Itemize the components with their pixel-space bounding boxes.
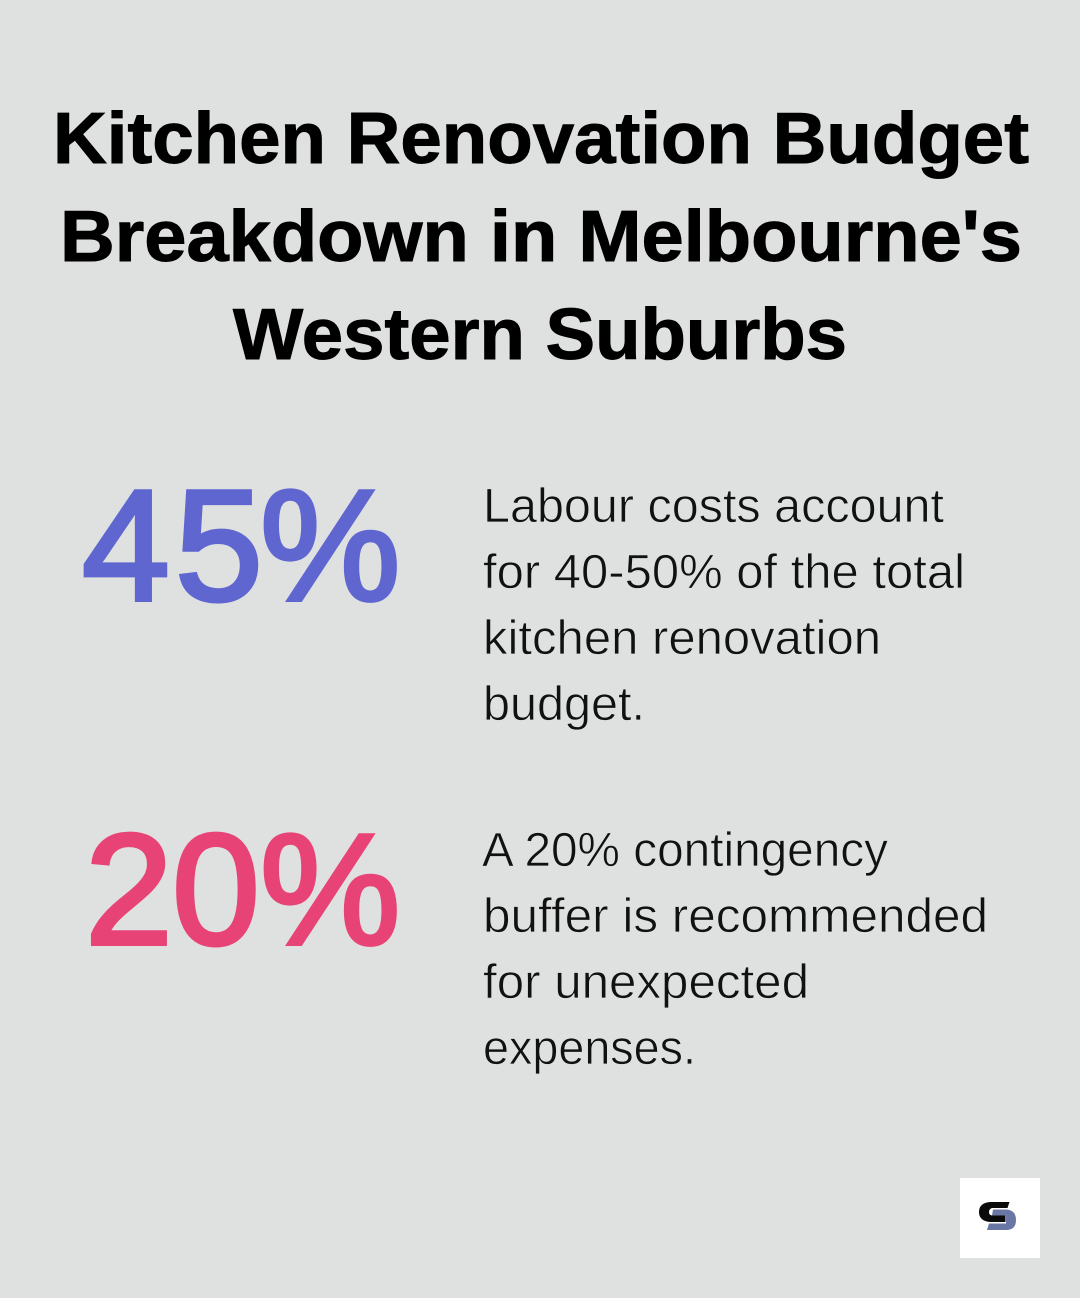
text block: labour costs [483, 480, 965, 731]
title [53, 99, 1029, 375]
title: Western Suburbs [233, 295, 847, 375]
text block: contingency buffer: for unexpected [483, 956, 809, 1009]
text block: contingency buffer [482, 824, 988, 1075]
title: Kitchen Renovation Budget [53, 99, 1029, 179]
title: Breakdown in Melbourne's [60, 197, 1022, 277]
logo badge [960, 1178, 1040, 1258]
text block: contingency buffer: expenses. [483, 1022, 696, 1075]
text block: contingency buffer: buffer is recommended [483, 890, 988, 943]
stat: 45%: 45% [82, 458, 400, 634]
stat: 20%: 20% [85, 802, 400, 978]
text block: labour costs: for 40-50% of the total [483, 546, 965, 599]
text block: labour costs: kitchen renovation [483, 612, 881, 665]
text block: labour costs: budget. [483, 678, 645, 731]
text block: contingency buffer: A 20% contingency [482, 824, 888, 877]
text block: labour costs: Labour costs account [483, 480, 944, 533]
